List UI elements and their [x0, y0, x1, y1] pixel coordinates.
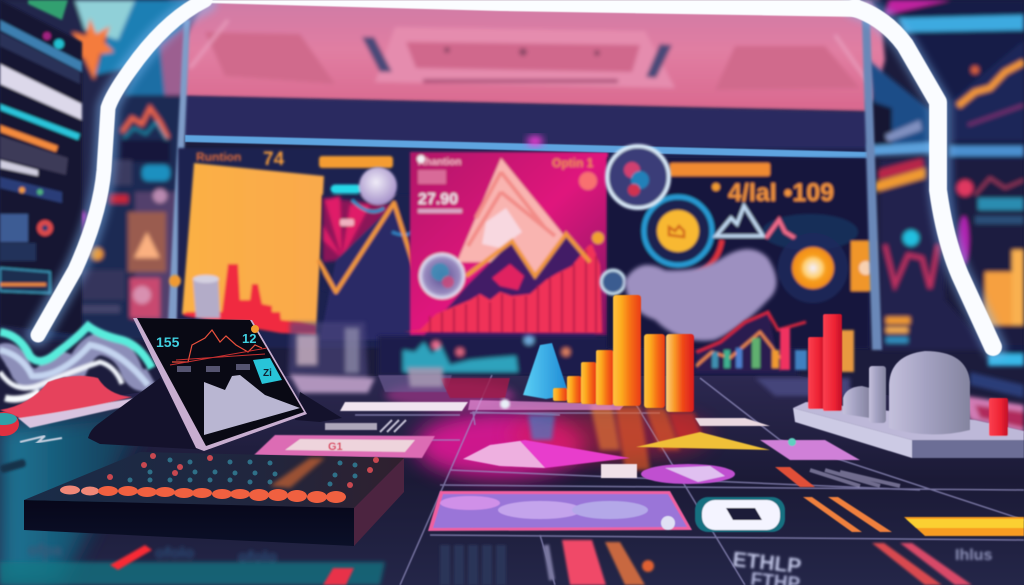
tablet chart — [172, 330, 262, 362]
glass orbs — [601, 146, 669, 294]
orange cylinder bars — [553, 295, 694, 412]
floor text bottom — [440, 540, 992, 585]
lower screen band — [378, 335, 798, 376]
tablet stand — [88, 378, 342, 450]
tablet — [88, 318, 342, 451]
panel: right dark dashboard: 4/lal •109 — [728, 179, 834, 207]
pink card — [254, 435, 435, 458]
glowing lens — [778, 233, 848, 303]
floor front labels: ofolo — [155, 545, 194, 562]
yellow triangle — [636, 432, 770, 450]
back wall band — [184, 96, 868, 152]
tablet mountain — [204, 375, 300, 435]
left pillar — [167, 20, 190, 340]
panel: sunburst and line chart — [318, 167, 436, 340]
orange stripes — [803, 497, 862, 532]
tablet body — [133, 318, 307, 451]
red cylinder small — [989, 398, 1008, 436]
blue strip — [185, 135, 868, 159]
icon: starburst — [68, 18, 114, 80]
tablet button — [253, 358, 282, 384]
ceiling — [165, 0, 885, 112]
panel: pink mountain chart: Rhantion — [418, 157, 461, 168]
keypad block — [24, 452, 404, 546]
floor text bottom: ETHLP — [731, 548, 802, 578]
bar reflections — [528, 404, 705, 470]
ceiling vent recess — [190, 20, 868, 90]
tablet: 12 — [242, 331, 256, 346]
orange line — [466, 234, 590, 276]
floor left marks — [20, 436, 62, 442]
LED row — [60, 486, 346, 503]
logo mark — [695, 497, 785, 532]
translucent mini diorama — [288, 322, 443, 393]
right side area — [868, 0, 1024, 366]
red cloth — [0, 376, 135, 428]
back shelf behind platform — [755, 372, 1024, 433]
left data panels — [0, 0, 82, 335]
orange glow on keypad — [270, 458, 325, 488]
small lower chart — [696, 310, 854, 372]
floor — [0, 376, 1024, 585]
right tile — [851, 241, 876, 291]
main screen background — [178, 148, 870, 348]
panel: pink mountain chart: Optin 1 — [552, 156, 594, 170]
floor text bottom: Ihlus — [955, 547, 992, 564]
tablet readout: 155 — [156, 334, 180, 350]
gauge — [644, 197, 712, 265]
orange bars — [985, 272, 1015, 325]
small pink tile — [760, 440, 860, 460]
small floor bars — [775, 467, 815, 487]
mountain outline icon — [716, 206, 763, 236]
grey cylinder — [869, 366, 886, 423]
right pillar — [862, 20, 882, 350]
panel: left chart: Runtion — [196, 150, 241, 164]
floor front labels: ofpa — [28, 542, 62, 559]
tablet: Zi — [263, 368, 272, 379]
purple map card — [428, 491, 692, 531]
panel: left chart — [169, 149, 393, 335]
line chart — [318, 203, 431, 320]
panel: left chart: 74 — [263, 149, 285, 170]
red floor lights — [0, 459, 354, 585]
panel: pink mountain chart: 27.90 — [418, 191, 458, 208]
panel: right dark dashboard — [607, 158, 876, 348]
floor front labels: ofolo — [238, 549, 277, 566]
neon arch frame — [38, 0, 995, 348]
pie — [463, 440, 630, 468]
cone — [523, 343, 569, 399]
floor grid — [340, 375, 1024, 585]
red cylinders — [808, 337, 825, 409]
panel: pink mountain chart — [404, 152, 608, 340]
floor cards — [254, 375, 1024, 536]
red dial — [0, 412, 19, 436]
small dome — [843, 386, 870, 418]
glass sphere — [359, 167, 397, 205]
striped triangle — [457, 158, 566, 278]
bar chart — [404, 244, 602, 333]
small chart: zigzag — [122, 108, 168, 138]
left side region behind arch — [0, 0, 200, 340]
glass orb — [419, 253, 465, 299]
floor glow — [415, 411, 585, 479]
floor cards: G1 — [328, 441, 343, 453]
white light band — [340, 402, 468, 411]
wave ribbons — [0, 326, 152, 399]
LED grid — [107, 453, 379, 488]
yellow bar — [904, 517, 1024, 536]
floor front labels — [0, 542, 385, 585]
large dome — [889, 351, 970, 435]
platform with 3D shapes — [793, 314, 1024, 458]
cloud shape — [625, 249, 776, 341]
small pie — [641, 464, 735, 484]
